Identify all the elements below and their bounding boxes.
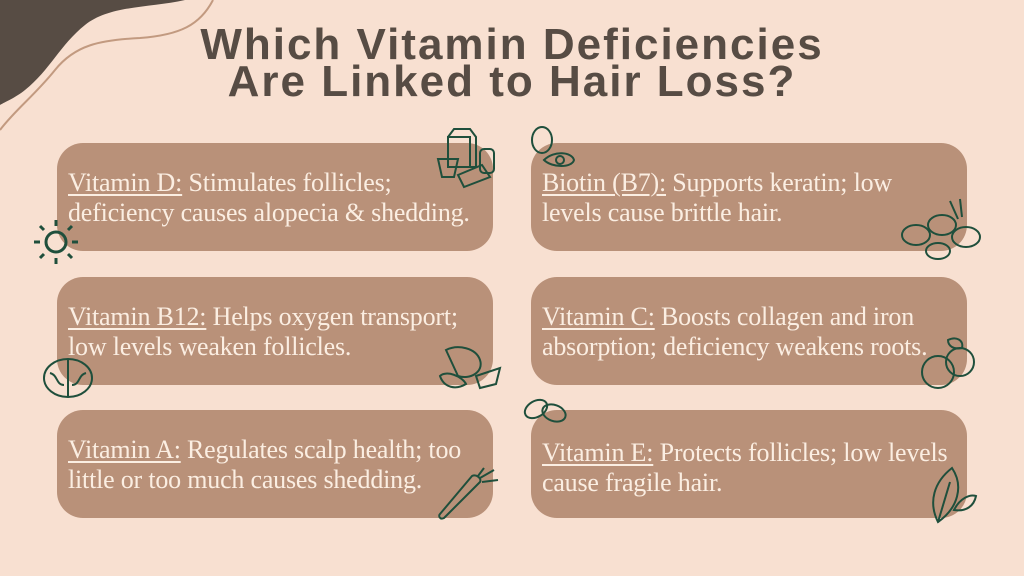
card: Vitamin A: Vitamin A: Regulates scalp health; too	[68, 435, 461, 464]
card: Vitamin C: Vitamin C: Boosts collagen and iron	[542, 302, 914, 331]
icon: seeds bowls	[901, 198, 981, 260]
card: Vitamin E: Vitamin E: Protects follicles; low levels	[542, 438, 947, 467]
icon: sun	[34, 220, 78, 264]
card: B12: Vitamin B12: Helps oxygen transport;	[68, 302, 458, 331]
card: Vitamin A: little or too much causes shedding.	[68, 465, 422, 494]
icon: carrot	[438, 467, 498, 520]
icon: citrus	[921, 337, 975, 389]
title: Are Linked to Hair Loss?	[228, 57, 796, 106]
card: Vitamin C	[531, 277, 967, 385]
card: Vitamin C: absorption; deficiency weakens roots.	[542, 332, 927, 361]
card: Biotin: Biotin (B7): Supports keratin; low	[542, 168, 892, 197]
card: Vitamin D: Vitamin D: Stimulates follicles;	[68, 168, 392, 197]
card: Vitamin D: deficiency causes alopecia & shedding.	[68, 198, 470, 227]
icon: spinach	[932, 466, 978, 524]
icon: brain/walnut	[43, 358, 93, 398]
card: Vitamin D	[57, 143, 493, 251]
card: B12: low levels weaken follicles.	[68, 332, 351, 361]
card: Biotin	[531, 143, 967, 251]
card: B12	[57, 277, 493, 385]
icon: dairy	[436, 128, 495, 188]
card: Vitamin E: cause fragile hair.	[542, 468, 722, 497]
icon: almonds	[524, 398, 567, 423]
icon: meat	[438, 346, 502, 390]
decorative blob top-left	[0, 0, 214, 130]
card: Vitamin A	[57, 410, 493, 518]
card: Vitamin E	[531, 410, 967, 518]
card: Biotin: levels cause brittle hair.	[542, 198, 782, 227]
title	[200, 20, 824, 106]
title: Which Vitamin Deficiencies	[200, 20, 824, 69]
icon: egg	[531, 126, 575, 167]
